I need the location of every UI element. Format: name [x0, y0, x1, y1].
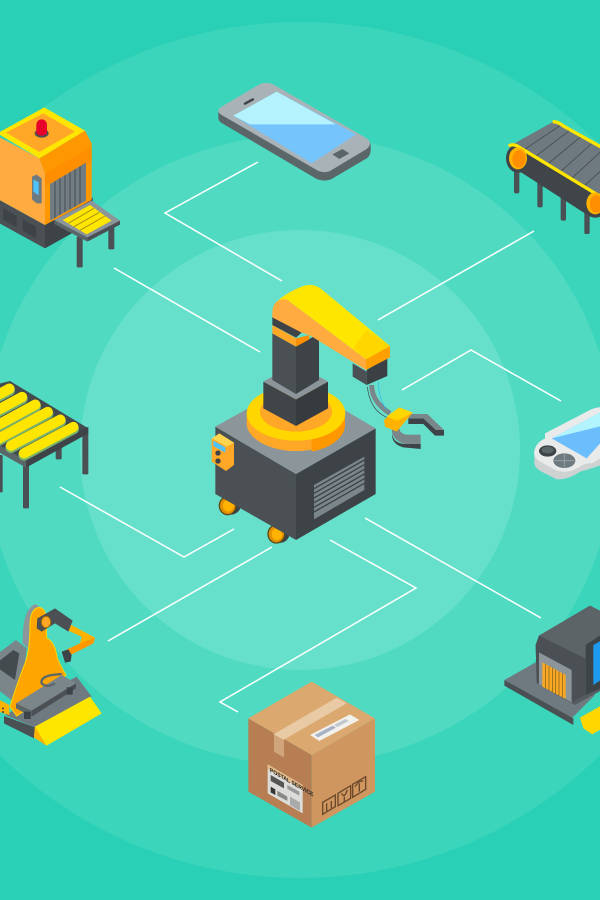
- control panel: [212, 433, 234, 471]
- connector lines: [60, 162, 561, 712]
- hot vent: [539, 652, 572, 702]
- handling icons: [323, 777, 366, 814]
- roller shutter: [50, 163, 86, 221]
- table legs: [0, 430, 88, 508]
- machine base: [0, 197, 93, 248]
- table frame: [0, 381, 88, 468]
- barcode label: [310, 714, 359, 741]
- conveyor side: [506, 144, 600, 218]
- blue screen: [586, 630, 600, 695]
- press machine: [504, 606, 600, 734]
- station base: [4, 677, 102, 746]
- conveyor legs: [514, 167, 590, 234]
- gripper: [384, 407, 444, 449]
- arm: [37, 608, 95, 663]
- yellow guard: [580, 703, 600, 734]
- gripper: [41, 674, 62, 686]
- shipping label: [268, 764, 314, 813]
- control box: [0, 699, 9, 715]
- machine body: [0, 107, 92, 225]
- work bench: [16, 675, 76, 719]
- belt edges: [509, 122, 600, 197]
- game console: [534, 407, 600, 479]
- rollers: [509, 147, 600, 214]
- shipping label: POSTAL SERVICE: [270, 768, 314, 799]
- smartphone: [218, 83, 371, 181]
- turntable ring: [247, 386, 345, 452]
- welding robot station: [0, 604, 102, 746]
- base cabinet: [215, 382, 376, 540]
- robot body: [10, 604, 66, 716]
- column: [272, 316, 319, 394]
- vent grille: [314, 457, 364, 519]
- roller table: [0, 381, 88, 508]
- rollers: [0, 389, 73, 455]
- side display: [32, 175, 42, 203]
- red beacon: [35, 119, 49, 138]
- cardboard box: [248, 682, 375, 828]
- output tray: [54, 201, 120, 242]
- wheels: [219, 497, 289, 543]
- packing tape: [273, 698, 347, 758]
- rear cage: [0, 640, 27, 707]
- upper arm: [272, 285, 390, 370]
- wrist block: [353, 357, 387, 385]
- packaging machine: [0, 107, 120, 267]
- tray legs: [77, 223, 114, 267]
- pedestal: [263, 363, 328, 426]
- cables: [367, 382, 390, 417]
- central robot arm: [212, 285, 444, 543]
- machine plate: [504, 660, 595, 725]
- belt surface: [513, 122, 600, 200]
- conveyor belt: [506, 122, 600, 234]
- machine housing: [536, 606, 600, 705]
